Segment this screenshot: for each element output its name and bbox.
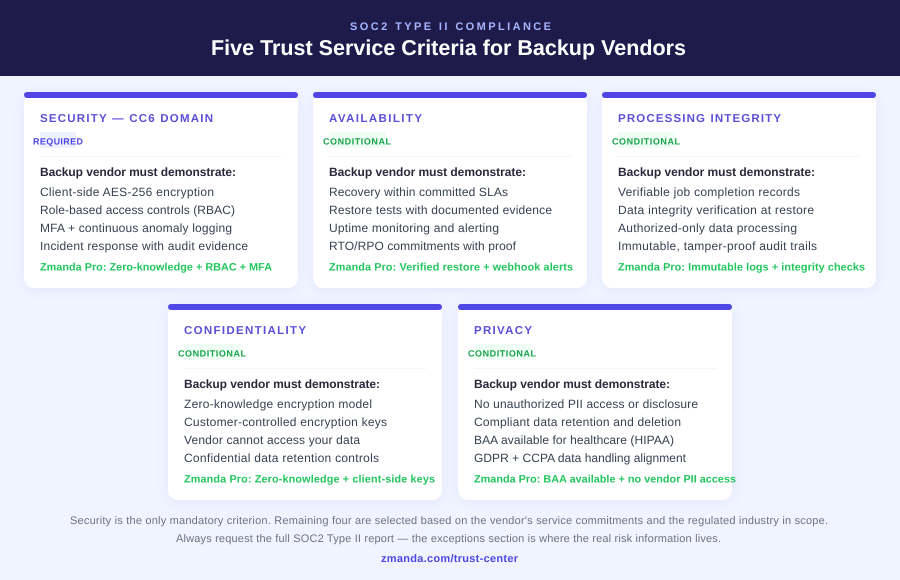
badge: conditional — [178, 344, 246, 360]
badge: conditional — [612, 132, 680, 148]
title: Five Trust Service Criteria for Backup Vendors — [211, 36, 686, 60]
eyebrow: SOC2 TYPE II COMPLIANCE — [350, 21, 551, 33]
panel: confidentiality — [168, 304, 442, 500]
footer note: Always request the full SOC2 Type II report — the exceptions section is where the real risk information lives. — [176, 533, 721, 545]
top accent bar — [168, 304, 442, 310]
zmanda note: Zmanda Pro: Zero-knowledge + client-side keys — [184, 474, 435, 486]
requirements list: Vendor cannot access your data — [184, 433, 360, 447]
panel: processing integrity — [602, 92, 876, 288]
top accent bar — [313, 92, 587, 98]
requirements list: Confidential data retention controls — [184, 451, 379, 465]
badge: conditional — [323, 132, 392, 148]
requirements list — [618, 165, 817, 253]
requirements list: Client-side AES-256 encryption — [40, 185, 214, 199]
requirements list: BAA available for healthcare (HIPAA) — [474, 433, 674, 447]
badge: conditional: CONDITIONAL — [323, 136, 392, 146]
badge: conditional: CONDITIONAL — [468, 348, 536, 358]
badge: conditional: CONDITIONAL — [612, 136, 680, 146]
zmanda note: Zmanda Pro: Verified restore + webhook alerts — [329, 262, 573, 274]
requirements list: Customer-controlled encryption keys — [184, 415, 387, 429]
requirements list: MFA + continuous anomaly logging — [40, 221, 232, 235]
requirements list: Incident response with audit evidence — [40, 239, 248, 253]
zmanda note: Zmanda Pro: Immutable logs + integrity checks — [618, 262, 865, 274]
footer note: Security is the only mandatory criterion. Remaining four are selected based on the vendor's service commitments and the regulated industry in scope. — [70, 515, 828, 527]
requirements list — [40, 165, 248, 253]
requirements list — [329, 165, 552, 253]
panel: security — [24, 92, 298, 288]
requirements list — [184, 377, 387, 465]
requirements list: Zero-knowledge encryption model — [184, 397, 372, 411]
requirements list: Immutable, tamper-proof audit trails — [618, 239, 817, 253]
requirements list: Recovery within committed SLAs — [329, 185, 508, 199]
badge: conditional: CONDITIONAL — [178, 348, 246, 358]
requirements list: Uptime monitoring and alerting — [329, 221, 499, 235]
header band — [0, 0, 900, 76]
panel: privacy — [458, 304, 736, 500]
criterion heading: CONFIDENTIALITY — [184, 325, 306, 337]
badge: required: REQUIRED — [33, 136, 84, 146]
requirements list: Data integrity verification at restore — [618, 203, 814, 217]
criterion heading: PROCESSING INTEGRITY — [618, 113, 781, 125]
zmanda note: Zmanda Pro: Zero-knowledge + RBAC + MFA — [40, 262, 272, 274]
criterion heading: AVAILABILITY — [329, 113, 422, 125]
requirements list: Verifiable job completion records — [618, 185, 800, 199]
requirements list: Restore tests with documented evidence — [329, 203, 552, 217]
criterion heading: PRIVACY — [474, 325, 532, 337]
requirements list: Backup vendor must demonstrate: — [474, 377, 670, 391]
criterion heading: SECURITY — CC6 DOMAIN — [40, 113, 213, 125]
badge: required — [33, 132, 84, 148]
top accent bar — [602, 92, 876, 98]
requirements list: Backup vendor must demonstrate: — [329, 165, 526, 179]
top accent bar — [458, 304, 732, 310]
footer note — [70, 515, 828, 545]
requirements list: No unauthorized PII access or disclosure — [474, 397, 698, 411]
footer link: zmanda.com/trust-center — [381, 553, 519, 565]
requirements list: Backup vendor must demonstrate: — [618, 165, 815, 179]
requirements list: Backup vendor must demonstrate: — [184, 377, 380, 391]
requirements list: Backup vendor must demonstrate: — [40, 165, 236, 179]
requirements list — [474, 377, 698, 465]
badge: conditional — [468, 344, 536, 360]
requirements list: RTO/RPO commitments with proof — [329, 239, 517, 253]
top accent bar — [24, 92, 298, 98]
panel: availability — [313, 92, 587, 288]
requirements list: Role-based access controls (RBAC) — [40, 203, 235, 217]
requirements list: Authorized-only data processing — [618, 221, 797, 235]
requirements list: Compliant data retention and deletion — [474, 415, 681, 429]
requirements list: GDPR + CCPA data handling alignment — [474, 451, 687, 465]
zmanda note: Zmanda Pro: BAA available + no vendor PII access — [474, 474, 736, 486]
